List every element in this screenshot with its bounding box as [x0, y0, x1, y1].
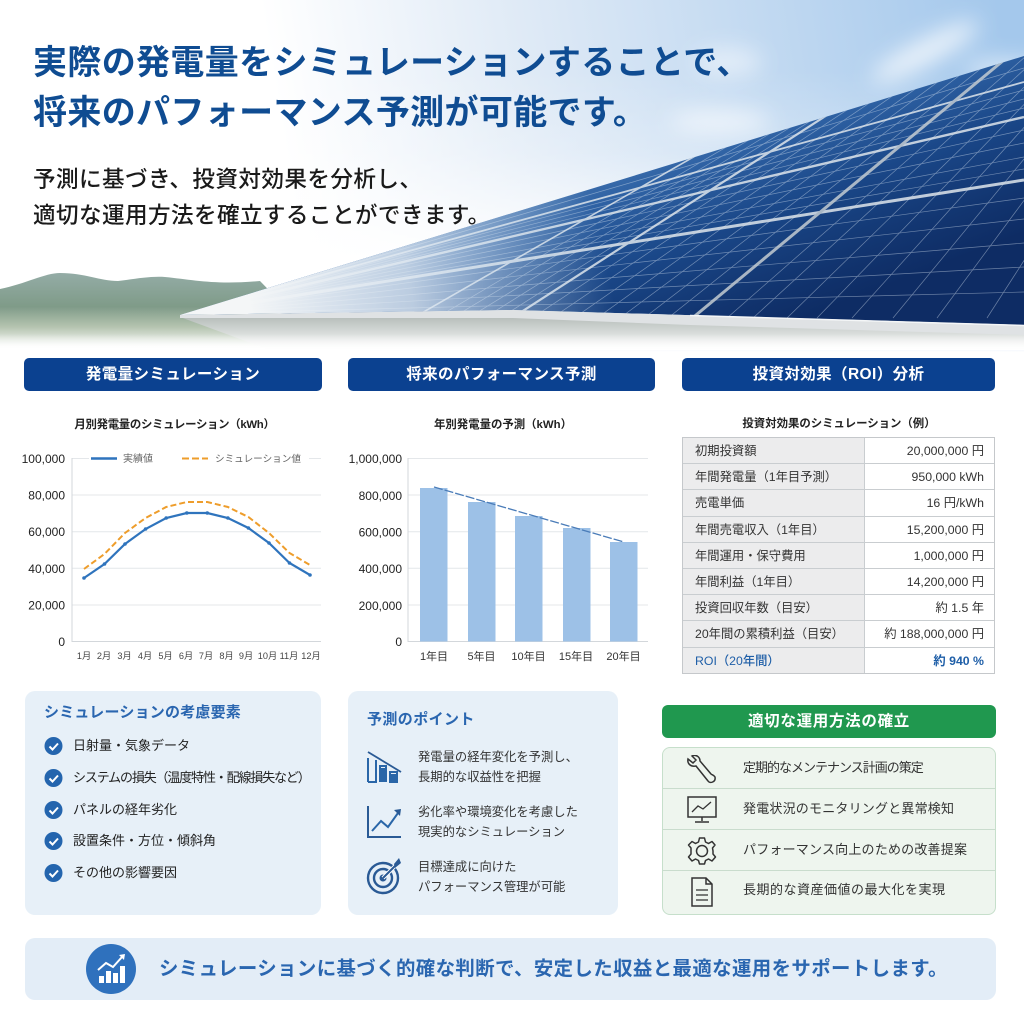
bar chart: yearly generation forecast: 0 [395, 635, 402, 649]
line chart: monthly generation: 11月 [280, 651, 298, 661]
line chart: monthly generation: 12月 [301, 651, 321, 661]
line chart: monthly generation: 5月 [158, 651, 173, 661]
line chart: monthly generation: 7月 [199, 651, 213, 661]
legend: 実績値 [123, 452, 153, 465]
text: improvement: パフォーマンス向上のための改善提案 [743, 842, 967, 857]
checklist: 設置条件・方位・傾斜角 [73, 833, 216, 848]
line chart: monthly generation: 40,000 [28, 562, 65, 576]
heading: future performance forecast: 将来のパフォーマンス予測 [406, 366, 597, 383]
ROI table: 年間発電量（1年目予測） [695, 470, 837, 484]
line chart: monthly generation: 20,000 [28, 598, 65, 612]
line chart: monthly generation: 4月 [138, 651, 152, 661]
icon: growth chart badge [86, 944, 136, 994]
bar chart: yearly generation forecast: 年別発電量の予測（kWh） [434, 417, 572, 431]
banner text: シミュレーションに基づく的確な判断で、安定した収益と最適な運用をサポートします。 [159, 958, 948, 980]
ROI table: 売電単価 [695, 496, 744, 510]
icon: gear [688, 837, 716, 865]
title: 実際の発電量をシミュレーションすることで、 [33, 44, 751, 82]
text: point 1: 長期的な収益性を把握 [418, 770, 541, 784]
line chart: monthly generation: 10月 [258, 651, 277, 661]
line chart: monthly generation: 3月 [117, 651, 132, 661]
legend: シミュレーション値 [215, 453, 301, 465]
ROI table [682, 437, 995, 674]
heading: power generation simulation [24, 358, 322, 391]
ROI table: 20,000,000 円 [907, 444, 984, 458]
checklist: その他の影響要因 [73, 865, 177, 880]
icon: target [366, 858, 401, 894]
bar chart: yearly generation forecast: 10年目 [511, 649, 546, 663]
text: point 3: 目標達成に向けた [418, 860, 516, 874]
icon: monitor [687, 796, 717, 823]
line chart: monthly generation: 8月 [219, 651, 234, 661]
line chart: monthly generation: 9月 [239, 651, 253, 661]
legend [89, 449, 309, 467]
heading: ROI analysis: 投資対効果（ROI）分析 [753, 366, 924, 383]
line chart: monthly generation: 60,000 [28, 525, 65, 539]
banner: conclusion [25, 938, 996, 1000]
ROI table: 15,200,000 円 [907, 523, 984, 537]
panel: forecast points [348, 691, 618, 915]
ROI table title: 投資対効果のシミュレーション（例） [742, 418, 936, 430]
icon: trend line [367, 806, 401, 838]
title: 将来のパフォーマンス予測が可能です。 [33, 94, 647, 132]
ROI table: 20年間の累積利益（目安） [695, 627, 844, 641]
ROI table: 初期投資額 [695, 444, 756, 458]
text: maintenance: 定期的なメンテナンス計画の策定 [743, 760, 923, 775]
ROI table: 約 1.5 年 [935, 601, 984, 615]
bar chart: yearly generation forecast: 600,000 [359, 526, 402, 540]
icon: declining bars [367, 751, 402, 783]
line chart: monthly generation: 6月 [179, 651, 193, 661]
text: point 1 [418, 750, 578, 784]
icon: wrench [687, 755, 716, 784]
text: point 2: 現実的なシミュレーション [418, 825, 565, 839]
text: point 3 [418, 860, 565, 894]
bar chart: yearly generation forecast: 200,000 [359, 599, 402, 613]
heading: operation methods [662, 705, 996, 738]
ROI table: 1,000,000 円 [914, 549, 984, 563]
checklist [44, 737, 310, 882]
bar chart: yearly generation forecast [349, 417, 648, 663]
ROI table: 950,000 kWh [912, 470, 984, 484]
text: point 2 [418, 805, 578, 839]
ROI table: 14,200,000 円 [907, 575, 984, 589]
bar chart: yearly generation forecast: 5年目 [467, 649, 496, 663]
panel heading: シミュレーションの考慮要素 [44, 704, 241, 721]
heading: operation methods: 適切な運用方法の確立 [748, 713, 910, 730]
text: asset value: 長期的な資産価値の最大化を実現 [743, 882, 946, 897]
heading: future performance forecast [348, 358, 655, 391]
line chart: monthly generation: 0 [58, 635, 65, 649]
text: point 3: パフォーマンス管理が可能 [418, 880, 565, 894]
heading: power generation simulation: 発電量シミュレーション [86, 366, 260, 383]
line chart: monthly generation: 80,000 [28, 488, 65, 502]
ROI table: 約 188,000,000 円 [884, 627, 984, 641]
heading: ROI analysis [682, 358, 995, 391]
checklist: 日射量・気象データ [73, 738, 190, 753]
bar chart: yearly generation forecast: 1,000,000 [349, 452, 402, 466]
bar chart: yearly generation forecast: 1年目 [420, 649, 448, 663]
bar chart: yearly generation forecast: 20年目 [606, 649, 641, 663]
line chart: monthly generation: 1月 [77, 651, 91, 661]
subtitle: 予測に基づき、投資対効果を分析し、 [33, 167, 422, 192]
text: point 2: 劣化率や環境変化を考慮した [418, 805, 578, 819]
icon: document [691, 877, 713, 907]
ROI table: 年間運用・保守費用 [695, 549, 806, 563]
ROI table: 約 940 % [933, 654, 984, 668]
ROI table: 投資回収年数（目安） [695, 601, 818, 615]
bar chart: yearly generation forecast: 15年目 [559, 649, 593, 663]
ROI table: ROI（20年間） [695, 654, 780, 668]
panel: operation methods [662, 747, 996, 915]
subtitle: 適切な運用方法を確立することができます。 [33, 203, 491, 228]
title [33, 44, 751, 132]
line chart: monthly generation: 2月 [97, 651, 111, 661]
line chart: monthly generation: 100,000 [22, 452, 65, 466]
text: point 1: 発電量の経年変化を予測し、 [418, 750, 578, 764]
ROI table: 年間利益（1年目） [695, 575, 800, 589]
checklist: システムの損失（温度特性・配線損失など） [73, 770, 310, 785]
line chart: monthly generation: 月別発電量のシミュレーション（kWh） [74, 417, 275, 431]
subtitle [33, 167, 491, 228]
panel heading: 予測のポイント [367, 711, 475, 728]
bar chart: yearly generation forecast: 800,000 [359, 489, 402, 503]
hero photo: solar panels and sky [0, 0, 1024, 350]
checklist: パネルの経年劣化 [73, 802, 177, 817]
line chart: monthly generation [22, 417, 321, 661]
ROI table: 年間売電収入（1年目） [695, 523, 825, 537]
ROI table: 16 円/kWh [927, 496, 984, 510]
panel: simulation factors [25, 691, 321, 915]
bar chart: yearly generation forecast: 400,000 [359, 562, 402, 576]
text: monitoring: 発電状況のモニタリングと異常検知 [743, 801, 954, 816]
